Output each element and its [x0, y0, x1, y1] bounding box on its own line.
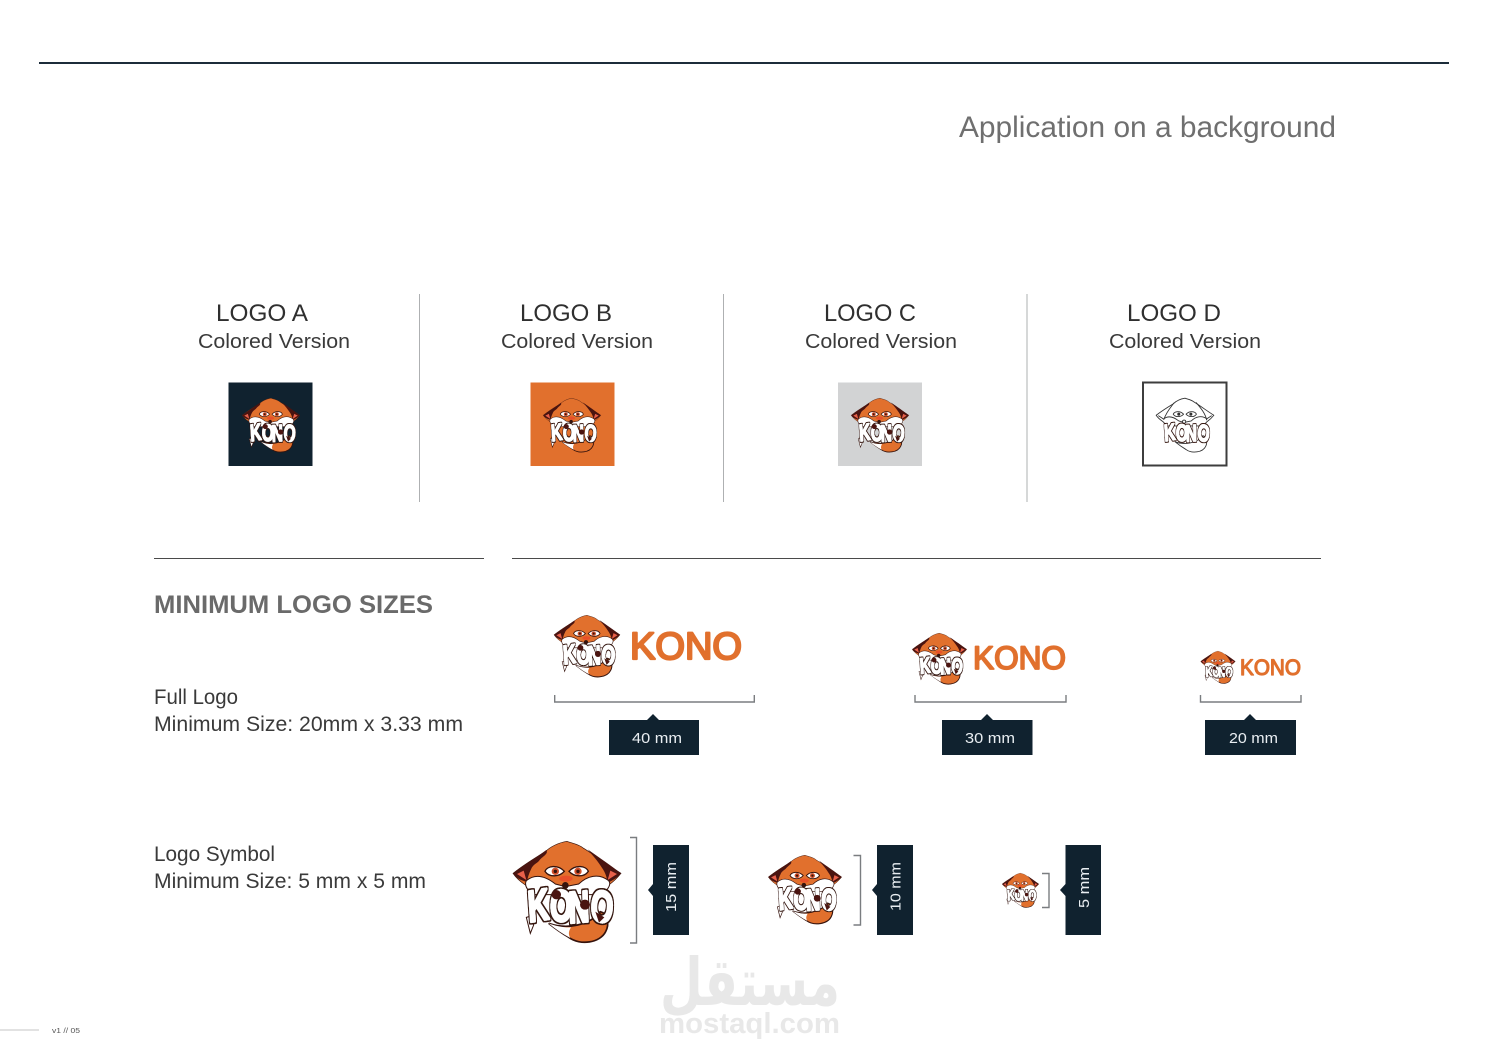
section rule left — [154, 558, 484, 559]
logo A title: LOGO A — [216, 300, 308, 327]
panel: logo C — [805, 300, 957, 466]
logo A fox mark — [242, 398, 300, 452]
divider — [419, 294, 420, 502]
logo B fox mark — [542, 398, 602, 452]
full logo 40 mm — [554, 615, 754, 755]
logo symbol description — [154, 843, 426, 893]
logo A fox mark: KONO — [249, 419, 297, 448]
footer version marker — [0, 1026, 80, 1035]
page heading: Application on a background — [959, 111, 1336, 144]
tag 10 mm: 10 mm — [888, 862, 904, 911]
bracket 10 mm — [854, 856, 860, 925]
tag 30 mm: 30 mm — [965, 730, 1015, 747]
logo symbol description: Logo Symbol — [154, 843, 275, 866]
tag 30 mm — [942, 714, 1032, 755]
section rule right — [512, 558, 1321, 559]
logo D title: LOGO D — [1127, 300, 1221, 327]
fox mark 30 mm — [912, 632, 967, 685]
panel: logo A — [198, 300, 350, 466]
fox mark 15 mm: KONO — [526, 879, 615, 933]
logo symbol 10 mm — [768, 845, 913, 935]
wordmark 20 mm: KONO — [1240, 655, 1301, 680]
watermark: مستقل — [660, 944, 840, 1021]
logo symbol 5 mm — [1002, 845, 1101, 935]
bracket 40 mm — [555, 695, 754, 702]
logo C fox mark: KONO — [858, 419, 906, 448]
fox mark 5 mm: KONO — [1007, 886, 1037, 905]
section heading: MINIMUM LOGO SIZES — [154, 591, 433, 619]
wordmark 30 mm: KONO — [973, 640, 1066, 676]
logo C title: LOGO C — [824, 300, 916, 327]
full logo description: Full Logo — [154, 686, 238, 709]
footer version marker: v1 // 05 — [52, 1026, 80, 1035]
fox mark 10 mm — [768, 855, 842, 924]
divider — [723, 294, 724, 502]
logo symbol description: Minimum Size: 5 mm x 5 mm — [154, 870, 426, 893]
watermark: mostaql.com — [659, 1008, 840, 1040]
tag 10 mm — [872, 845, 913, 935]
tag 40 mm: 40 mm — [632, 730, 682, 747]
logo B subtitle: Colored Version — [501, 331, 653, 353]
logo C fox mark — [850, 398, 910, 452]
logo C grey tile — [838, 382, 922, 466]
logo A subtitle: Colored Version — [198, 331, 350, 353]
watermark — [659, 944, 840, 1040]
divider — [1026, 294, 1028, 502]
tag 40 mm — [609, 714, 699, 755]
fox mark 20 mm: KONO — [1205, 663, 1233, 681]
top rule — [39, 62, 1449, 64]
logo A dark tile — [228, 382, 312, 466]
full logo description: Minimum Size: 20mm x 3.33 mm — [154, 713, 463, 736]
logo B fox mark: KONO — [550, 419, 598, 448]
fox mark 10 mm: KONO — [777, 882, 838, 918]
panel: logo D — [1109, 300, 1261, 466]
tag 15 mm: 15 mm — [663, 862, 680, 912]
tag 15 mm — [648, 845, 689, 935]
tag 20 mm: 20 mm — [1229, 730, 1278, 747]
bracket 30 mm — [915, 695, 1066, 702]
logo C subtitle: Colored Version — [805, 331, 957, 353]
logo D outlined tile — [1143, 382, 1226, 466]
logo symbol 15 mm — [513, 838, 689, 943]
fox mark 40 mm: KONO — [562, 638, 617, 671]
fox mark 30 mm: KONO — [919, 652, 964, 679]
logo B title: LOGO B — [520, 300, 612, 327]
fox mark 15 mm — [512, 841, 622, 944]
logo D subtitle: Colored Version — [1109, 331, 1261, 353]
full logo description — [154, 686, 463, 736]
wordmark 40 mm: KONO — [630, 626, 742, 668]
logo D line-art fox mark — [1156, 398, 1214, 452]
fox mark 40 mm — [554, 615, 620, 678]
panel: logo B — [501, 300, 653, 466]
logo B orange tile — [530, 382, 614, 466]
tag 5 mm: 5 mm — [1076, 867, 1093, 908]
bracket 20 mm — [1200, 695, 1301, 702]
logo D line-art fox mark: KONO — [1163, 419, 1211, 448]
full logo 30 mm — [912, 633, 1066, 755]
full logo 20 mm — [1200, 651, 1301, 755]
bracket 5 mm — [1042, 874, 1049, 908]
bracket 15 mm — [630, 838, 636, 943]
